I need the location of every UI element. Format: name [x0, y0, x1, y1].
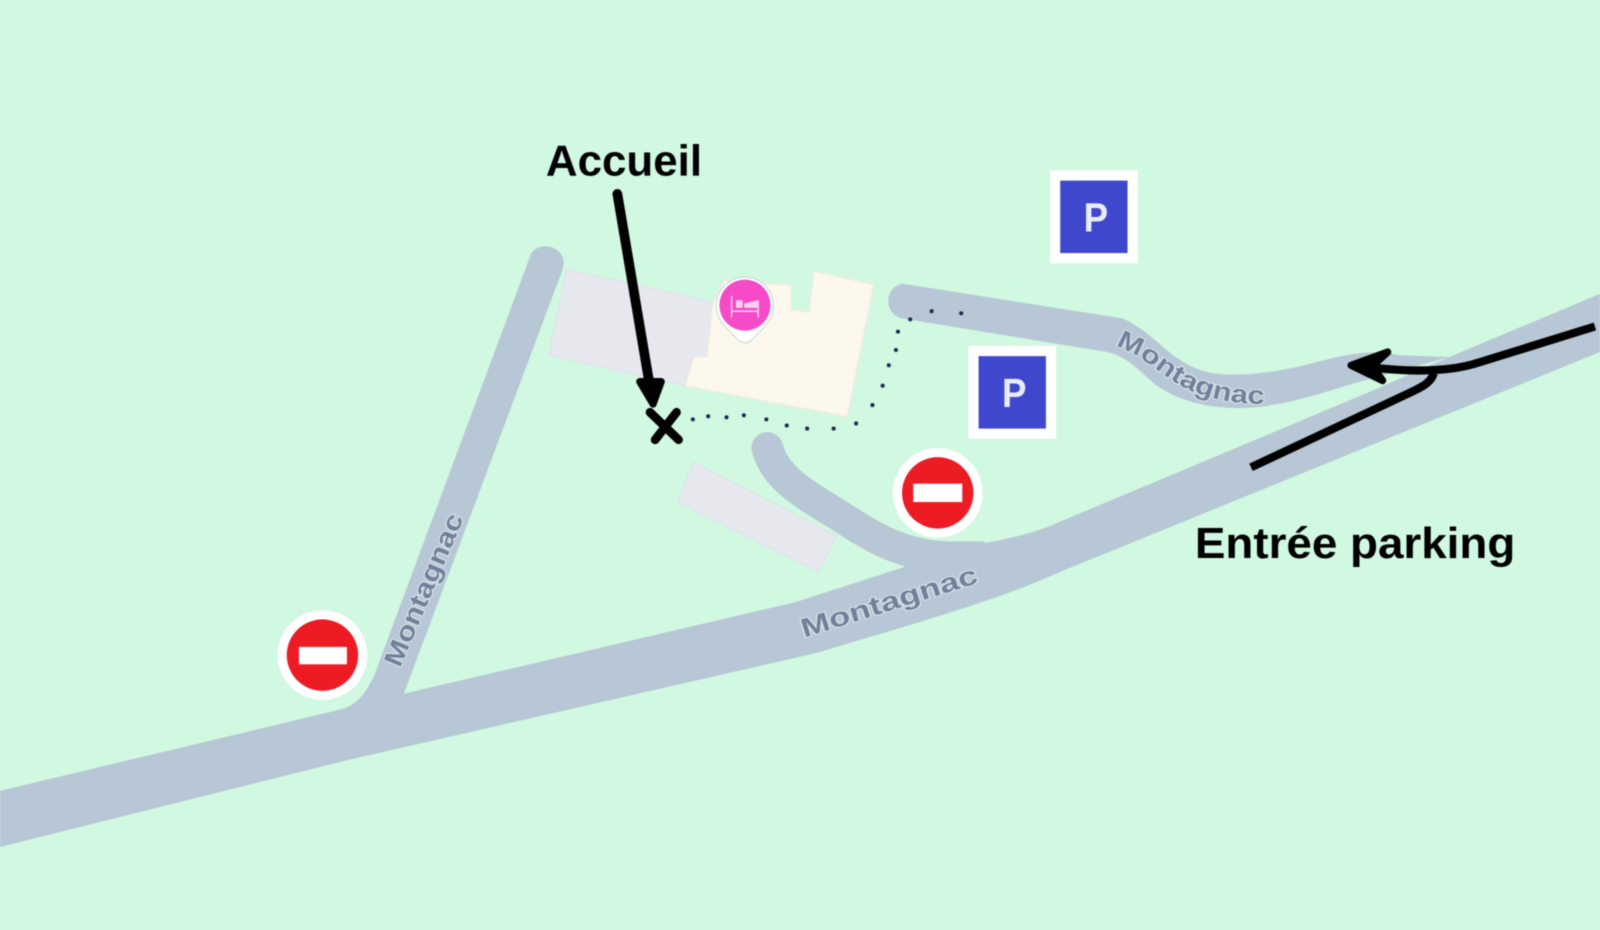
parking sign: lower: [968, 346, 1056, 439]
heading: Accueil: Accueil: [546, 137, 702, 186]
road: middle branch: [767, 448, 980, 557]
parking sign: lower: P: [1002, 370, 1027, 416]
road: left branch: [367, 246, 564, 696]
heading: Entrée parking: Entrée parking: [1195, 519, 1515, 568]
icon: hotel pin: [716, 277, 773, 343]
building: grey left: [549, 269, 713, 386]
road label: left branch: Montagnac: [378, 509, 469, 671]
arrow: parking entrance: [1251, 327, 1595, 467]
parking sign: top: P: [1084, 195, 1108, 241]
parking sign: top: [1050, 170, 1138, 263]
road: main Montagnac: [0, 294, 1600, 847]
walking path dots: [691, 309, 963, 431]
building: grey lower: [678, 462, 837, 571]
no entry sign: centre: [893, 448, 983, 538]
arrow: Accueil: [617, 194, 661, 404]
marker: reception cross: [650, 412, 679, 440]
road label: main: Montagnac: [797, 560, 981, 643]
no entry sign: left: [278, 610, 367, 700]
building: hotel: [686, 271, 873, 416]
road: upper right branch: [888, 284, 1449, 408]
road label: right branch: Montagnac: [1116, 329, 1265, 406]
